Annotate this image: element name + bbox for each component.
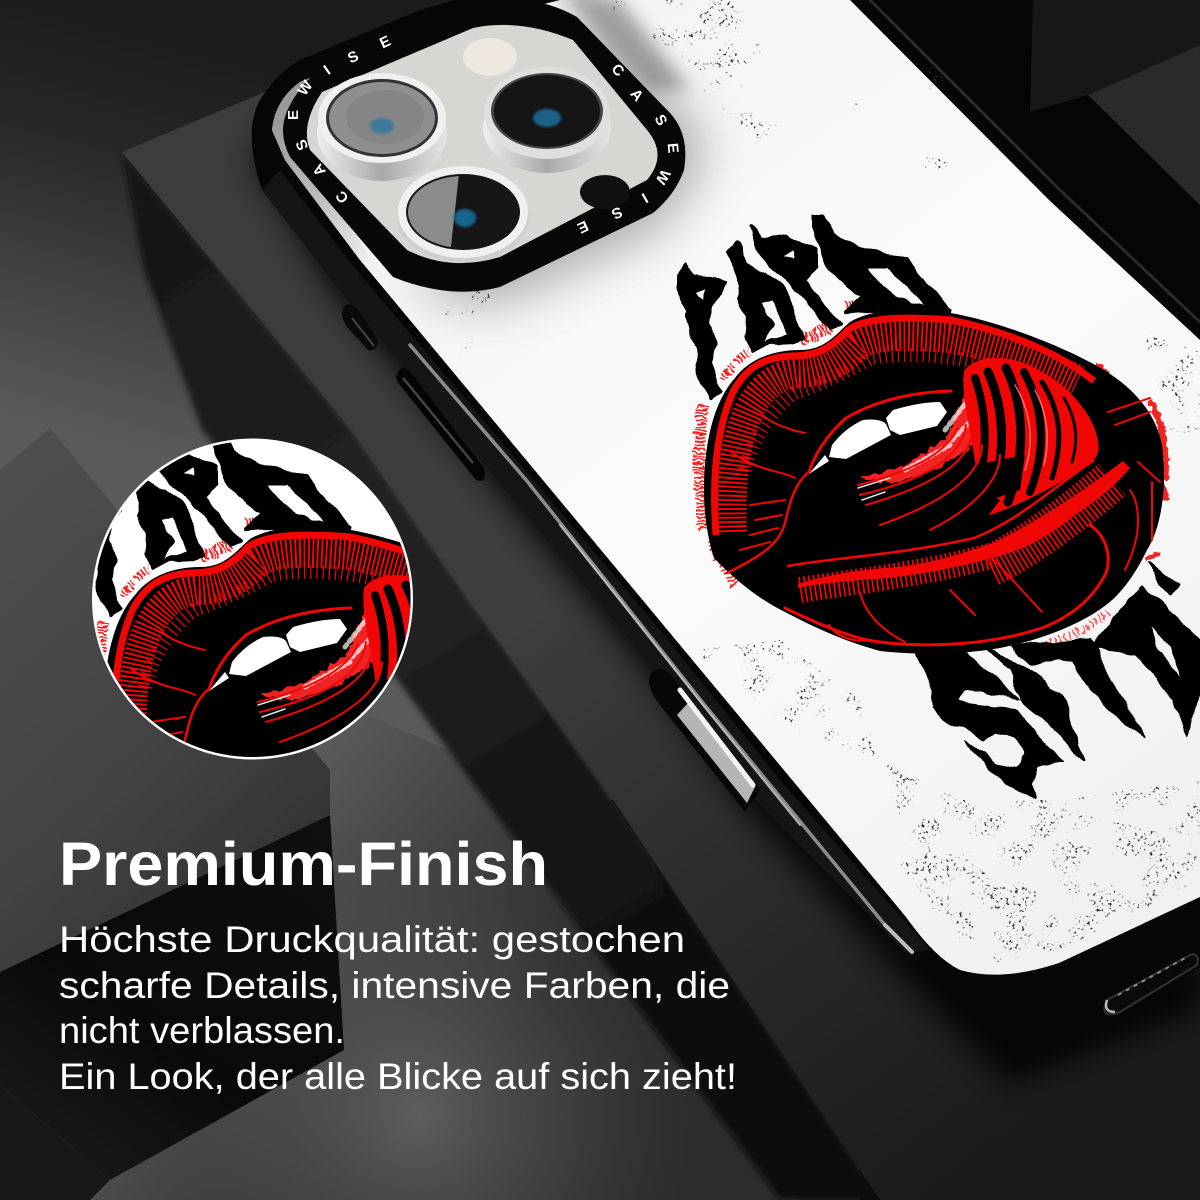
- brand lettering on ring: S: [345, 48, 361, 67]
- lens right: [483, 67, 611, 173]
- white printed back: [272, 0, 1200, 975]
- brand lettering on ring: W: [651, 166, 673, 188]
- block: main plinth side face: [122, 152, 880, 1200]
- body text: nicht verblassen.: [59, 1010, 345, 1051]
- body text: Ein Look, der alle Blicke auf sich zieht!: [59, 1056, 737, 1097]
- body text: Höchste Druckqualität: gestochen: [59, 919, 685, 960]
- brand lettering on ring: [285, 33, 681, 236]
- lens bottom: [397, 166, 529, 262]
- body text: scharfe Details, intensive Farben, die: [59, 965, 730, 1006]
- camera shadow on back: [420, 0, 705, 305]
- lips base: [704, 310, 1164, 654]
- red splatter: [699, 303, 1166, 644]
- phone body: [252, 0, 1200, 1043]
- lower lip hatched field: [800, 480, 1112, 590]
- brand lettering on ring: I: [321, 62, 334, 79]
- tongue: [858, 358, 1099, 530]
- camera window: [307, 25, 658, 263]
- teeth: [829, 420, 891, 459]
- microphone hole: [580, 175, 630, 209]
- magnified artwork: [95, 442, 410, 757]
- heading: Premium-Finish: [59, 830, 548, 898]
- lens left: [317, 73, 447, 181]
- charging port: [1104, 954, 1198, 1014]
- brand lettering on ring: I: [639, 189, 651, 206]
- brand lettering on ring: A: [309, 160, 329, 179]
- left corner shading: [272, 66, 385, 280]
- bottom lettering: [918, 562, 1200, 798]
- brand lettering on ring: W: [294, 77, 317, 99]
- brand lettering on ring: E: [664, 142, 681, 154]
- phone shadow: [250, 100, 1200, 1085]
- floor lit area: [0, 640, 800, 1200]
- top lettering: [680, 216, 951, 398]
- phone: [252, 0, 1200, 1043]
- upper lip red edge and hatching: [715, 318, 1094, 535]
- brand lettering on ring: E: [575, 217, 591, 236]
- brand lettering on ring: E: [285, 110, 302, 120]
- illustration: lips artwork: [680, 216, 1200, 798]
- distressed speckle texture: [440, 0, 1200, 965]
- brand lettering on ring: S: [651, 112, 670, 129]
- camera frame: [283, 0, 685, 292]
- side button slots: [342, 304, 760, 812]
- body text: [59, 919, 737, 1097]
- block: lower step: [0, 428, 344, 1200]
- brand lettering on ring: C: [608, 61, 628, 80]
- silver side button: [677, 690, 755, 803]
- flash: [463, 38, 517, 76]
- side wall shading: [262, 170, 930, 953]
- detail magnifier circle: [92, 438, 413, 760]
- lower lip red: [798, 461, 1130, 588]
- front ring overlap: [590, 175, 672, 226]
- camera module: [283, 0, 685, 292]
- brand lettering on ring: E: [377, 33, 393, 52]
- brand lettering on ring: A: [627, 86, 647, 105]
- silver edge highlights: [410, 0, 1200, 952]
- brand lettering on ring: C: [332, 187, 352, 206]
- brand lettering on ring: S: [609, 203, 625, 222]
- brand lettering on ring: S: [293, 137, 312, 153]
- lip contour lines: [727, 391, 1160, 645]
